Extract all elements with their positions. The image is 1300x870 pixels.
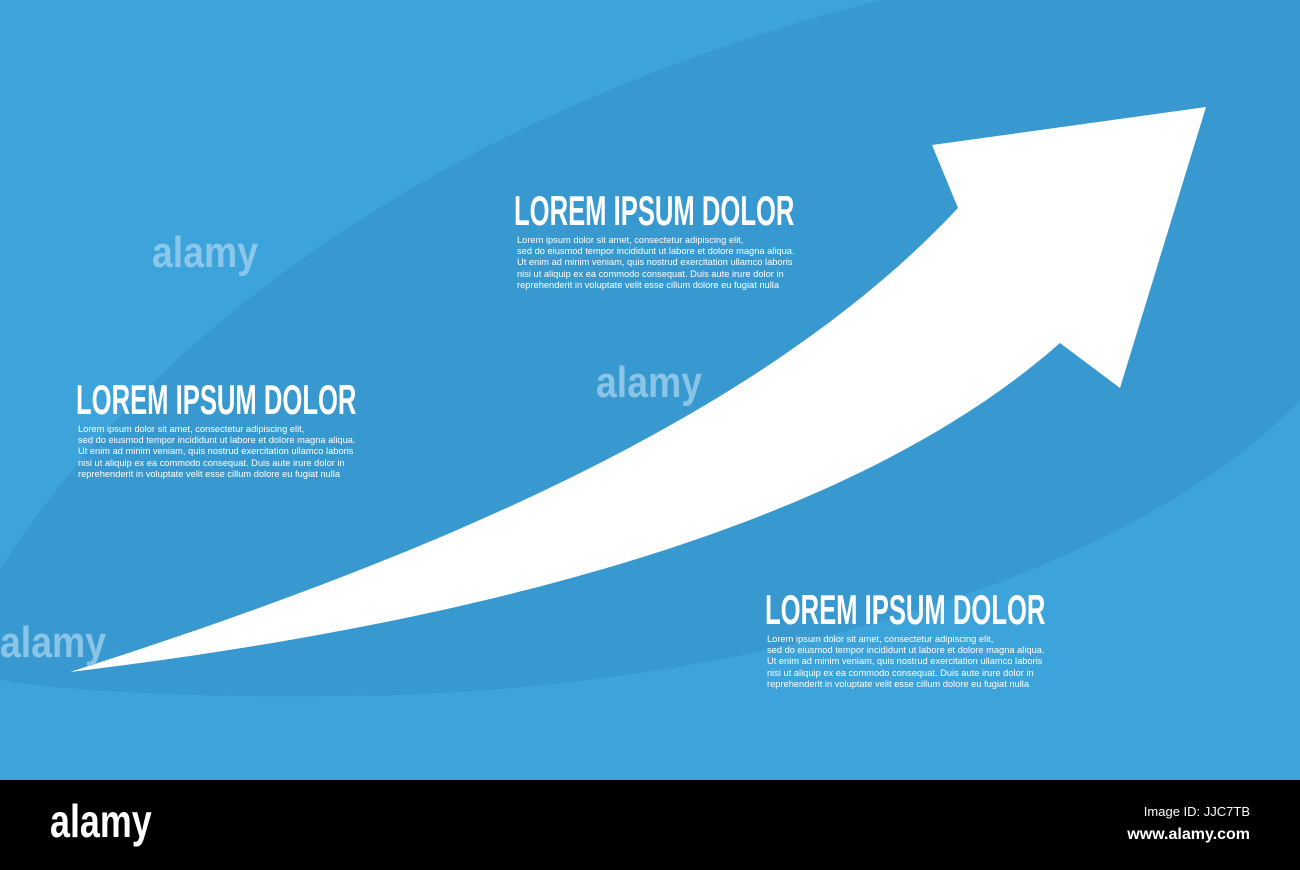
text block: left: Ut enim ad minim veniam, quis nostrud exercitation ullamco laboris <box>78 446 353 456</box>
text block: left: Lorem ipsum dolor sit amet, consectetur adipiscing elit, <box>78 424 304 434</box>
text block: bottom right: Lorem ipsum dolor sit amet, consectetur adipiscing elit, <box>767 634 993 644</box>
text block: left: reprehenderit in voluptate velit esse cillum dolore eu fugiat nulla <box>78 469 340 479</box>
text block: left <box>78 424 356 479</box>
footer logo: alamy <box>50 795 152 847</box>
text block: top: Ut enim ad minim veniam, quis nostrud exercitation ullamco laboris <box>517 257 792 267</box>
text block: bottom right <box>767 634 1045 689</box>
heading: left: LOREM IPSUM DOLOR <box>76 376 356 423</box>
text block: bottom right: reprehenderit in voluptate velit esse cillum dolore eu fugiat nulla <box>767 679 1029 689</box>
watermark: alamy <box>0 618 106 667</box>
text block: bottom right: nisi ut aliquip ex ea commodo consequat. Duis aute irure dolor in <box>767 668 1034 678</box>
text block: top <box>517 235 795 290</box>
text block: bottom right: Ut enim ad minim veniam, quis nostrud exercitation ullamco laboris <box>767 656 1042 666</box>
watermark: alamy <box>152 228 258 277</box>
text block: left: sed do eiusmod tempor incididunt ut labore et dolore magna aliqua. <box>78 435 356 445</box>
watermark: alamy <box>596 358 702 407</box>
text block: top: nisi ut aliquip ex ea commodo consequat. Duis aute irure dolor in <box>517 269 784 279</box>
image id: Image ID: JJC7TB <box>1144 804 1250 819</box>
heading: top: LOREM IPSUM DOLOR <box>514 187 794 234</box>
footer bar <box>0 780 1300 870</box>
text block: top: reprehenderit in voluptate velit esse cillum dolore eu fugiat nulla <box>517 280 779 290</box>
text block: left: nisi ut aliquip ex ea commodo consequat. Duis aute irure dolor in <box>78 458 345 468</box>
text block: top: Lorem ipsum dolor sit amet, consectetur adipiscing elit, <box>517 235 743 245</box>
heading: bottom right: LOREM IPSUM DOLOR <box>765 586 1045 633</box>
text block: top: sed do eiusmod tempor incididunt ut labore et dolore magna aliqua. <box>517 246 795 256</box>
footer url: www.alamy.com <box>1127 826 1250 843</box>
text block: bottom right: sed do eiusmod tempor incididunt ut labore et dolore magna aliqua. <box>767 645 1045 655</box>
